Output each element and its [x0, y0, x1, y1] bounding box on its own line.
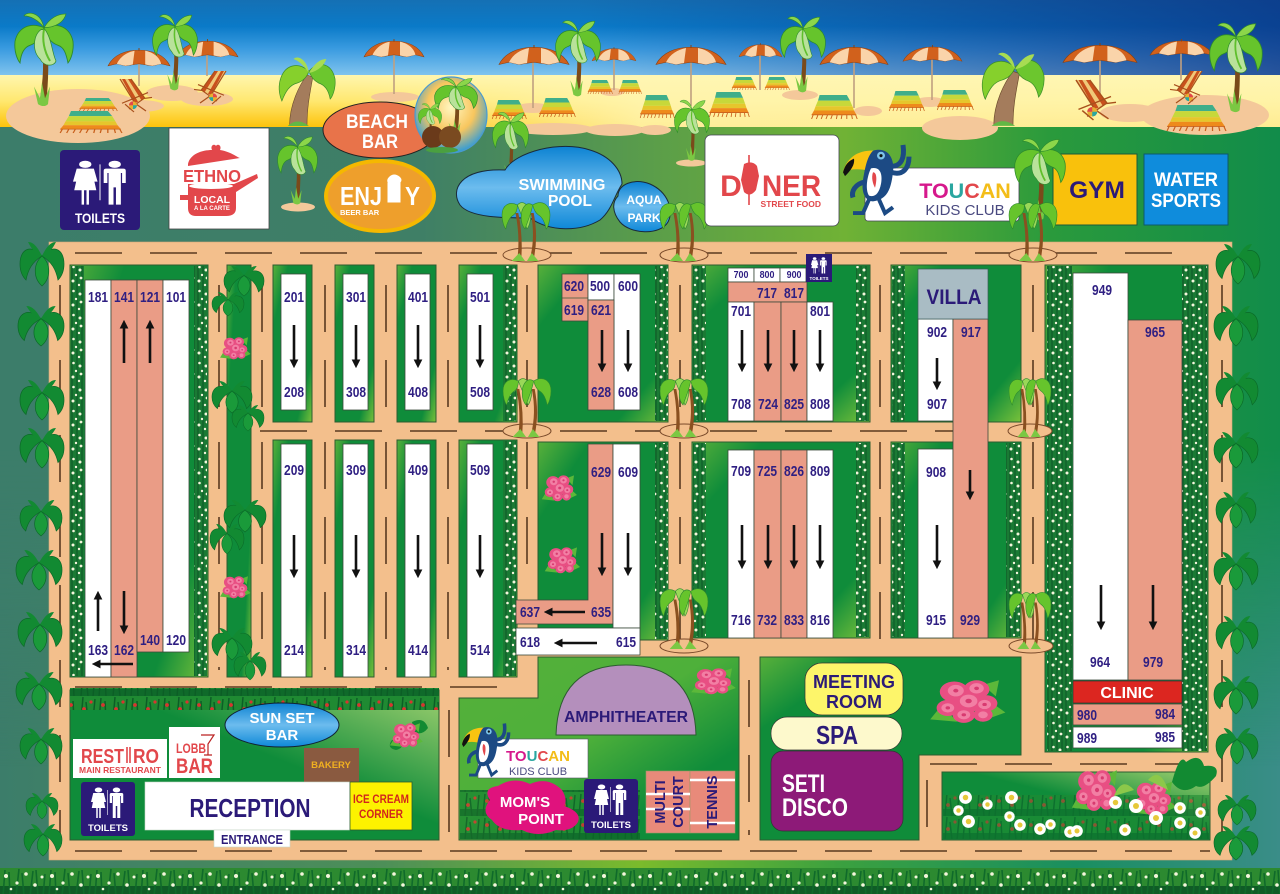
- rooms 709-833 block: [692, 442, 870, 638]
- sun set bar: [225, 703, 339, 747]
- block: rooms 101-181: [70, 265, 208, 677]
- rooms 700-900 block: 800: [760, 269, 775, 281]
- lobby bar: [169, 727, 220, 778]
- aqua park: AQUA: [626, 193, 662, 207]
- rooms 500-628: 621: [591, 302, 611, 318]
- road network: [49, 242, 1232, 860]
- villa block: 902: [927, 324, 947, 340]
- reception: [145, 782, 350, 830]
- rooms 201-314 columns: 309: [346, 462, 366, 478]
- rooms 609-637: 629: [591, 464, 611, 480]
- rooms 700-900 block: 708: [731, 396, 751, 412]
- rooms 500-628: 620: [564, 278, 584, 294]
- rooms 949-989 with clinic: 984: [1155, 706, 1175, 722]
- toucan kids club small: TOUCAN: [506, 748, 570, 765]
- rooms 949-989 with clinic: 985: [1155, 729, 1175, 745]
- rooms 501-514: 501: [470, 289, 490, 305]
- bottom flower strip: [0, 868, 1280, 894]
- villa label: [918, 269, 988, 319]
- toucan kids club logo: [843, 145, 1019, 221]
- villa block: [891, 265, 1021, 638]
- rooms 501-514: [459, 265, 517, 677]
- ice cream corner: ICE CREAM: [353, 792, 409, 806]
- rooms 949-989 with clinic: 980: [1077, 707, 1097, 723]
- restro main restaurant: MAIN RESTAURANT: [79, 765, 162, 775]
- meeting room: MEETING: [813, 672, 895, 692]
- rooms 709-833 block: 725: [757, 463, 777, 479]
- rooms 181, 141, 121, 101: 163: [88, 642, 108, 658]
- rooms 181, 141, 121, 101: [85, 280, 189, 677]
- rooms 181, 141, 121, 101: 121: [140, 289, 160, 305]
- rooms 949-989 with clinic: 965: [1145, 324, 1165, 340]
- icon: toilets: TOILETS: [88, 823, 128, 834]
- rooms 500-628: 619: [564, 302, 584, 318]
- rooms 709-833 block: 816: [810, 612, 830, 628]
- rooms 949-989 with clinic: 964: [1090, 654, 1110, 670]
- icon: toilets sign: [60, 150, 140, 230]
- villa block: 915: [926, 612, 946, 628]
- rooms 700-900 block: [692, 254, 870, 422]
- rooms 700-900 block: 808: [810, 396, 830, 412]
- rooms 700-900 block: 717: [757, 285, 777, 301]
- beach palm trees: [15, 13, 1262, 126]
- clinic: [1073, 681, 1182, 703]
- villa label: VILLA: [926, 286, 982, 309]
- rooms 181, 141, 121, 101: 162: [114, 642, 134, 658]
- ethno restaurant logo: ETHNO: [183, 166, 241, 186]
- panel: meeting, spa and disco area: [760, 657, 1021, 840]
- rooms 609-637: 635: [591, 604, 611, 620]
- rooms 501-514: 508: [470, 384, 490, 400]
- spa: [771, 717, 902, 750]
- rooms 949-989 with clinic: 989: [1077, 730, 1097, 746]
- rooms 201-314 columns: 208: [284, 384, 304, 400]
- gym: [1053, 154, 1137, 225]
- diner street food: STREET FOOD: [761, 199, 821, 209]
- rooms 181, 141, 121, 101: 101: [166, 289, 186, 305]
- enjoy beer bar sign: BEER BAR: [340, 208, 380, 217]
- rooms 709-833 block: 826: [784, 463, 804, 479]
- palms over logos: [1009, 139, 1065, 261]
- diner street food: [705, 135, 839, 226]
- beach sand: [0, 75, 1280, 127]
- rooms 201-314 columns: 408: [408, 384, 428, 400]
- beach towels: [60, 77, 1226, 133]
- lobby bar: BAR: [176, 755, 213, 778]
- aqua park: PARK: [627, 211, 661, 225]
- multi court and tennis: MULTI: [653, 780, 669, 824]
- rooms 709-833 block: 732: [757, 612, 777, 628]
- rooms 501-514: 509: [470, 462, 490, 478]
- villa block: 907: [927, 396, 947, 412]
- flower: [930, 680, 1005, 723]
- rooms 709-833 block: 833: [784, 612, 804, 628]
- rooms 700-900 block: 724: [758, 396, 778, 412]
- seti disco: DISCO: [782, 794, 848, 822]
- rooms 500-628: [538, 265, 668, 422]
- toucan kids club small: [462, 723, 588, 778]
- rooms 609-637: 609: [618, 464, 638, 480]
- amphitheater: AMPHITHEATER: [564, 709, 688, 726]
- rooms 201-314 columns: 201: [284, 289, 304, 305]
- rooms 181, 141, 121, 101: 140: [140, 632, 160, 648]
- street palms over pool: [502, 203, 708, 261]
- multi court and tennis: COURT: [671, 776, 687, 828]
- rooms 700-900 block: 900: [787, 269, 802, 281]
- bakery: [304, 748, 359, 782]
- swimming pool: SWIMMING: [518, 177, 606, 194]
- amphitheater: [556, 665, 696, 735]
- beach bar globe with palm and coconuts: [415, 77, 487, 153]
- restro main restaurant: [73, 739, 167, 778]
- rooms 201-314 columns: 409: [408, 462, 428, 478]
- rooms 201-314 columns: 314: [346, 642, 366, 658]
- rooms 500-628: 600: [618, 278, 638, 294]
- right column palm leaves: [1214, 244, 1260, 860]
- toucan kids club small: KIDS CLUB: [509, 766, 567, 778]
- toucan kids club logo: KIDS CLUB: [925, 202, 1005, 219]
- rooms 201-314 columns: [273, 265, 436, 677]
- rooms 700-900 block: 700: [734, 269, 749, 281]
- flower: [691, 668, 736, 694]
- panel: flower garden: [942, 758, 1217, 840]
- seti disco: SETI: [782, 770, 825, 798]
- ethno restaurant logo: A LA CARTE: [194, 206, 230, 212]
- rooms 700-900 block: 817: [784, 285, 804, 301]
- rooms 709-833 block: 716: [731, 612, 751, 628]
- villa block: 929: [960, 612, 980, 628]
- enjoy beer bar sign: ENJ: [340, 181, 382, 211]
- icon: small toilets sign: TOILETS: [810, 276, 828, 281]
- block: planted strip with climbing palms: [210, 265, 266, 680]
- icon: toilets: [81, 782, 135, 836]
- water sports: [1144, 154, 1228, 225]
- flower: [390, 720, 428, 750]
- rooms 609-637: 615: [616, 634, 636, 650]
- left column palm leaves: [16, 242, 64, 856]
- spa: SPA: [816, 720, 858, 750]
- ethno restaurant logo: LOCAL: [194, 194, 231, 206]
- rooms 201-314 columns: 301: [346, 289, 366, 305]
- icon: toilets: [584, 779, 638, 833]
- beach umbrellas: [108, 39, 1213, 108]
- diner street food: D: [720, 170, 742, 203]
- background ground: [171, 127, 1280, 868]
- rooms 709-833 block: 809: [810, 463, 830, 479]
- beach bar sign: [323, 102, 437, 158]
- deck chairs: [120, 71, 1202, 120]
- enjoy beer bar sign: [326, 161, 434, 231]
- mom's point: POINT: [518, 811, 564, 828]
- rooms 709-833 block: 709: [731, 463, 751, 479]
- reception: RECEPTION: [190, 793, 310, 823]
- rooms 700-900 block: 801: [810, 303, 830, 319]
- rooms 949-989 with clinic: 979: [1143, 654, 1163, 670]
- villa block: 917: [961, 324, 981, 340]
- mom's point: MOM'S: [500, 794, 550, 811]
- rooms 181, 141, 121, 101: 120: [166, 632, 186, 648]
- water sports: SPORTS: [1151, 190, 1221, 212]
- meeting room: ROOM: [826, 692, 882, 712]
- ice cream corner: [350, 782, 412, 830]
- toucan kids club logo: TOUCAN: [919, 179, 1011, 203]
- rooms 700-900 block: 825: [784, 396, 804, 412]
- panel: amphitheater area: [459, 657, 739, 840]
- rooms 181, 141, 121, 101: 181: [88, 289, 108, 305]
- rooms 201-314 columns: 401: [408, 289, 428, 305]
- meeting room: [805, 663, 903, 715]
- bakery: BAKERY: [311, 760, 352, 771]
- rooms 201-314 columns: 308: [346, 384, 366, 400]
- swimming pool: POOL: [548, 193, 592, 210]
- sky: [0, 0, 1280, 75]
- restro main restaurant: REST: [81, 746, 124, 768]
- rooms 500-628: 500: [590, 278, 610, 294]
- lobby bar: LOBB: [176, 740, 206, 756]
- beach bar sign: BEACH: [346, 112, 408, 133]
- clinic: CLINIC: [1100, 685, 1154, 702]
- rooms 949-989 with clinic: 949: [1092, 282, 1112, 298]
- swimming pool: [456, 146, 622, 229]
- diner street food: NER: [762, 170, 821, 203]
- rooms 181, 141, 121, 101: 141: [114, 289, 134, 305]
- multi court and tennis: TENNIS: [705, 775, 721, 829]
- rooms 501-514: 514: [470, 642, 490, 658]
- rooms 609-637: 618: [520, 634, 540, 650]
- beach sand patches: [6, 85, 1269, 143]
- entrance: ENTRANCE: [221, 833, 283, 847]
- aqua park: [614, 182, 670, 232]
- villa block: 908: [926, 464, 946, 480]
- sun set bar: BAR: [266, 727, 298, 744]
- panel: reception area: [70, 688, 439, 847]
- enjoy beer bar sign: Y: [405, 181, 420, 211]
- icon: toilets sign: TOILETS: [75, 210, 125, 226]
- icon: toilets: TOILETS: [591, 820, 631, 831]
- ethno restaurant logo: [169, 128, 269, 229]
- water sports: WATER: [1154, 169, 1218, 191]
- ice cream corner: CORNER: [359, 807, 403, 821]
- rooms 949-989 with clinic: [1045, 265, 1208, 752]
- rooms 609-637: 637: [520, 604, 540, 620]
- seti disco: [771, 751, 903, 831]
- rooms 201-314 columns: 209: [284, 462, 304, 478]
- mom's point: [485, 780, 579, 834]
- street palms with ovals: [278, 100, 1057, 653]
- beach bar sign: BAR: [362, 132, 398, 153]
- multi court and tennis: [646, 771, 735, 833]
- gym: GYM: [1069, 177, 1125, 204]
- rooms 609-637: [516, 442, 668, 655]
- restro main restaurant: RO: [133, 746, 159, 768]
- rooms 500-628: 628: [591, 384, 611, 400]
- rooms 500-628: 608: [618, 384, 638, 400]
- icon: small toilets sign: [806, 254, 832, 282]
- rooms 700-900 block: 701: [731, 303, 751, 319]
- rooms 201-314 columns: 414: [408, 642, 428, 658]
- rooms 201-314 columns: 214: [284, 642, 304, 658]
- sun set bar: SUN SET: [249, 710, 315, 727]
